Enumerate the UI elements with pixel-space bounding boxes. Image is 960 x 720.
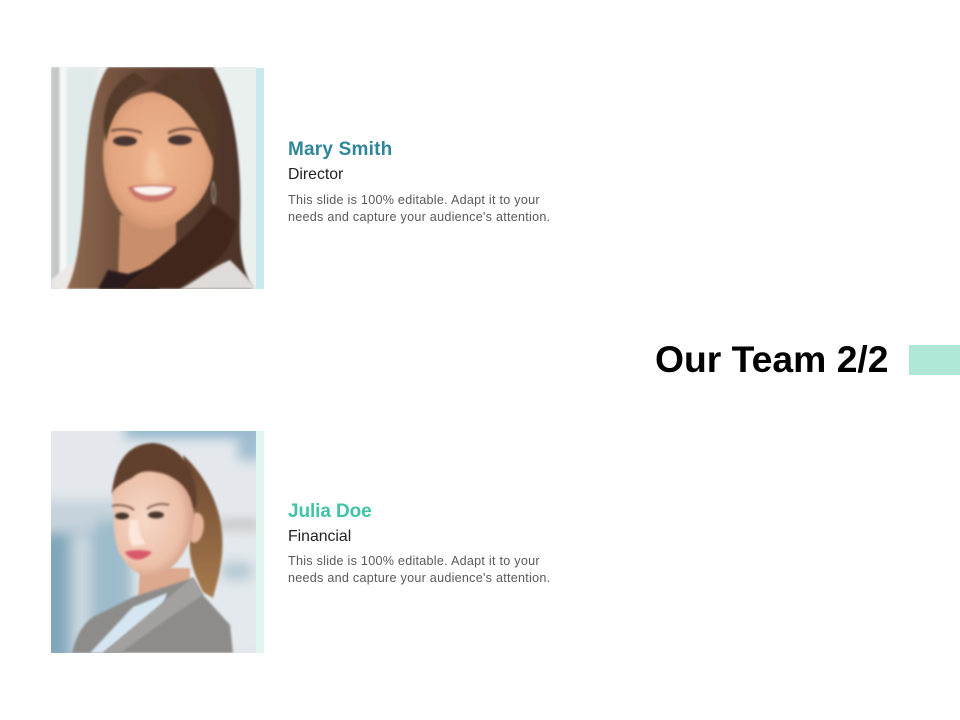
role: Financial: Financial: [288, 528, 351, 545]
description: Mary Smith: [288, 193, 550, 224]
name: Julia Doe: Julia Doe: [288, 501, 372, 522]
role: Director: Director: [288, 166, 343, 183]
panel: Julia Doe text: [288, 501, 550, 584]
title: Our Team 2/2: [655, 338, 889, 380]
panel: Mary Smith text: [288, 139, 550, 224]
facial features: [112, 504, 169, 560]
description: Mary Smith: This slide is 100% editable. Adapt it to your: [288, 193, 540, 207]
facial features: [111, 129, 215, 204]
description: Julia Doe: needs and capture your audience's attention.: [288, 570, 550, 584]
name: Mary Smith: Mary Smith: [288, 139, 392, 160]
photo accent strip: [256, 431, 264, 653]
description: Mary Smith: needs and capture your audience's attention.: [288, 210, 550, 224]
title accent bar: [909, 345, 960, 375]
description: Julia Doe: [288, 554, 550, 584]
portrait: Julia Doe: [51, 431, 256, 653]
panel: Mary Smith photo: [51, 67, 264, 289]
description: Julia Doe: This slide is 100% editable. Adapt it to your: [288, 554, 540, 568]
photo accent strip: [256, 68, 264, 289]
panel: Julia Doe photo: [51, 431, 264, 653]
portrait: Mary Smith: [51, 67, 256, 289]
